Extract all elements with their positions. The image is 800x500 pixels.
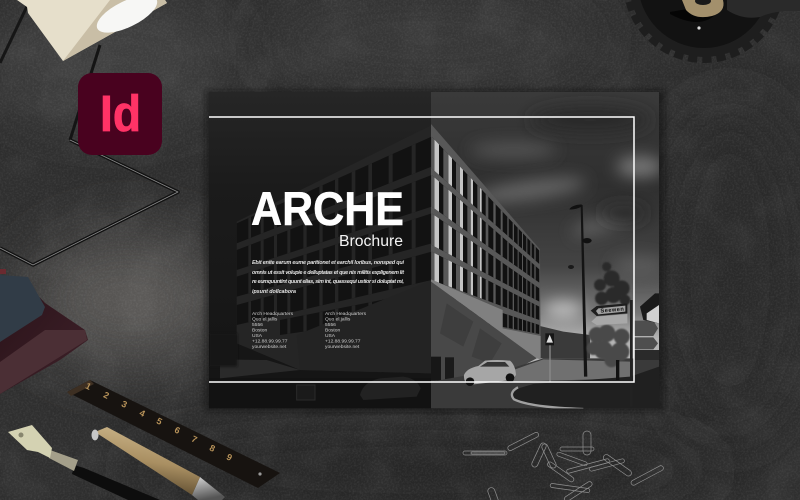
text block: address column 2: Boston (325, 328, 341, 334)
subheading: Brochure: Brochure (339, 233, 403, 250)
book with leather cover (0, 269, 88, 394)
ruler: 9 (225, 452, 234, 463)
ruler: 6 (173, 425, 182, 436)
text block: address column 2 (325, 311, 367, 350)
text block: intro paragraph: ipsunt dollcabora (252, 289, 296, 295)
road and ground (431, 358, 659, 408)
panel: brochure right page photo (430, 92, 667, 409)
text block: address column 2: Arch Headquarters (325, 311, 367, 317)
text block: address column 1: USA (252, 333, 263, 339)
gold pen (92, 427, 225, 500)
lamp shade (17, 0, 167, 61)
ruler: 2 (102, 390, 111, 401)
text block: intro paragraph (252, 260, 404, 295)
text block: address column 2: yourwebsite.net (325, 344, 360, 350)
ruler (67, 380, 280, 488)
text block: address column 1: Boston (252, 328, 268, 334)
lamp stand wires (0, 0, 178, 265)
text block: address column 1: 5556 (252, 322, 263, 328)
icon: InDesign logo (78, 73, 162, 155)
text block: intro paragraph: Ebit enite earum eume paritionet et earchil loribus, nonsped qui (252, 260, 404, 266)
road signs (545, 300, 658, 382)
drafting tool (8, 425, 160, 500)
distant hills (540, 326, 590, 358)
car (464, 360, 516, 386)
text block: intro paragraph: omnis ut essit volupie e delluptatas et que nis militis expligenem lit (252, 270, 404, 276)
icon: InDesign logo: Id (100, 85, 141, 142)
ruler: 3 (120, 399, 129, 410)
road signs: Seewen (600, 307, 625, 315)
house (640, 293, 659, 323)
panel: brochure left page (209, 92, 433, 408)
building facade (431, 124, 541, 382)
ruler: 7 (190, 434, 199, 445)
text block: address column 1: yourwebsite.net (252, 344, 287, 350)
text block: address column 1: +12.88.99.99.77 (252, 338, 288, 344)
text block: address column 1: Arch Headquarters (252, 311, 294, 317)
ruler: 5 (155, 416, 164, 427)
tree (587, 262, 630, 380)
lamp post (568, 204, 592, 377)
text block: address column 2: 5556 (325, 322, 336, 328)
concrete plinth (431, 279, 541, 359)
ruler: 8 (208, 443, 217, 454)
paper clips (463, 431, 664, 500)
brochure shadow (205, 90, 665, 412)
heading: ARCHE: ARCHE (251, 182, 404, 235)
text block: address column 2: Quo el.jallis (325, 316, 351, 322)
text block: address column 1: Quo el.jallis (252, 316, 278, 322)
text block: address column 2: USA (325, 333, 336, 339)
gear (628, 0, 800, 58)
ruler: 4 (138, 408, 147, 419)
white frame (209, 117, 634, 382)
building silhouette, left page (209, 125, 433, 408)
text block: address column 1 (252, 311, 294, 350)
sky clouds (470, 107, 667, 318)
ruler: 1 (84, 381, 93, 392)
text block: intro paragraph: re eumquuntint quunt elias, sim int, quassequi ustior si doluptat mi, (252, 279, 404, 285)
text block: address column 2: +12.88.99.99.77 (325, 338, 361, 344)
roundabout island and bushes (512, 367, 659, 408)
